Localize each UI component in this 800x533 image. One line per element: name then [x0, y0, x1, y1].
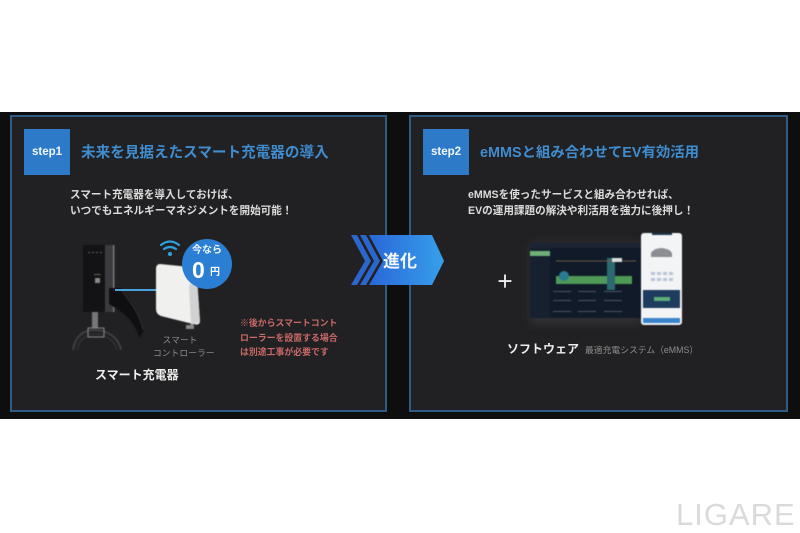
plus sign: ＋: [496, 272, 514, 292]
step 1 badge: step1: [32, 146, 62, 158]
step 2 badge: [423, 129, 469, 175]
note: ※後からスマートコント: [240, 318, 337, 328]
step 2 description: EVの運用課題の解決や利活用を強力に後押し！: [468, 205, 694, 217]
step 2 badge: step2: [431, 146, 461, 158]
step 2 description: eMMSを使ったサービスと組み合わせれば、: [468, 189, 679, 201]
badge: 今なら0円: [182, 239, 232, 289]
step 1 badge: [24, 129, 70, 175]
charger label: スマート充電器: [95, 368, 179, 382]
software sublabel: 最適充電システム（eMMS）: [585, 345, 698, 355]
controller label: スマート: [163, 335, 197, 345]
panel: step 2: [409, 115, 788, 412]
step 1 heading: 未来を見据えたスマート充電器の導入: [81, 145, 329, 161]
badge: 今なら0円: 0: [192, 257, 205, 283]
step 2 heading: eMMSと組み合わせてEV有効活用: [480, 145, 699, 161]
step 2 description: [468, 188, 694, 217]
step 1 description: [70, 188, 292, 217]
controller label: [153, 335, 215, 358]
note: ローラーを設置する場合: [240, 332, 338, 342]
note: は別途工事が必要です: [240, 347, 329, 357]
connection line: charger to controller: [115, 289, 157, 291]
note: [240, 318, 338, 357]
badge: 今なら0円: 円: [210, 267, 220, 278]
step 1 description: いつでもエネルギーマネジメントを開始可能！: [70, 205, 292, 217]
controller label: コントローラー: [153, 348, 215, 358]
badge: 今なら0円: 今なら: [192, 245, 222, 256]
dark band background: [0, 112, 800, 419]
watermark: LIGARE: LIGARE: [676, 497, 796, 532]
panel: step 1: [10, 115, 387, 412]
arrow: 進化: 進化: [383, 252, 417, 271]
step 1 description: スマート充電器を導入しておけば、: [70, 189, 239, 201]
software label: ソフトウェア: [507, 342, 579, 356]
